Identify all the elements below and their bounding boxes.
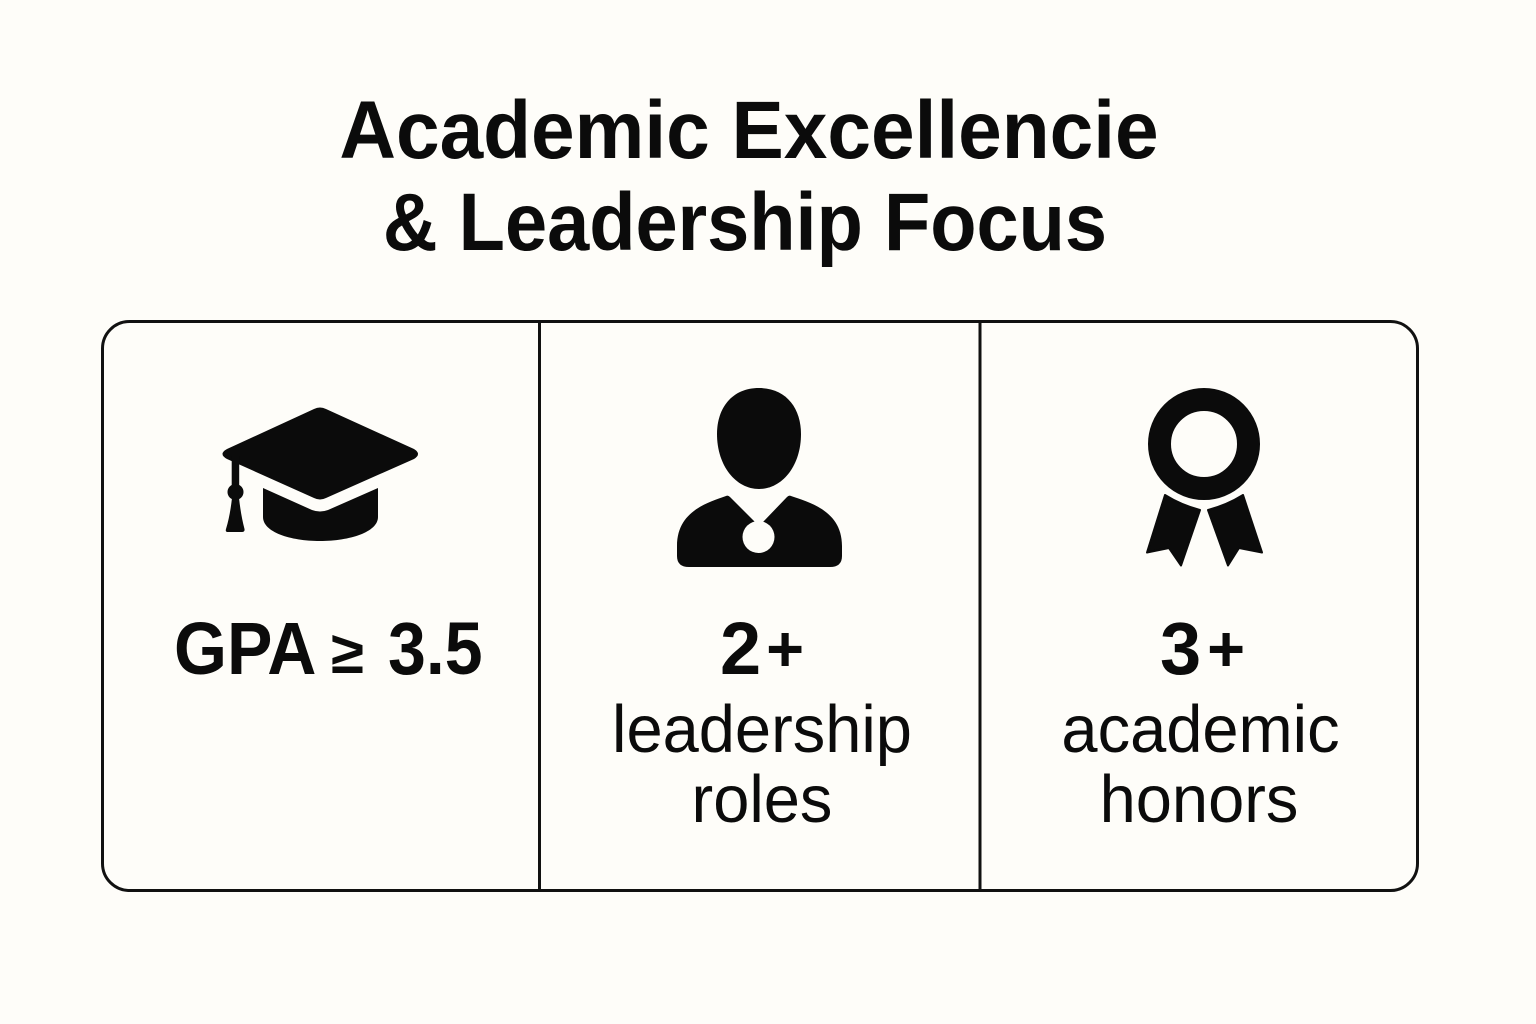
stat: leadership roles: roles <box>692 762 832 837</box>
title: Academic Excellencie <box>339 85 1158 176</box>
stat: GPA: GPA <box>174 607 316 690</box>
stat: academic honors: 3+ <box>1160 607 1245 690</box>
stat: academic honors: academic <box>1061 692 1340 767</box>
icon: graduation cap <box>222 408 418 541</box>
stat: GPA <box>174 607 482 690</box>
stat: leadership roles: leadership <box>612 692 912 767</box>
stat: academic honors: honors <box>1100 762 1298 837</box>
icon: award ribbon <box>1147 400 1262 566</box>
stat: GPA: ≥ <box>331 619 364 686</box>
title <box>339 85 1158 268</box>
stat: leadership roles: 2+ <box>720 607 804 690</box>
icon: person with medal <box>677 388 842 567</box>
title: & Leadership Focus <box>383 177 1107 268</box>
stat: leadership roles <box>612 607 912 837</box>
stat: academic honors <box>1061 607 1340 837</box>
stat: GPA: 3.5 <box>388 607 482 690</box>
